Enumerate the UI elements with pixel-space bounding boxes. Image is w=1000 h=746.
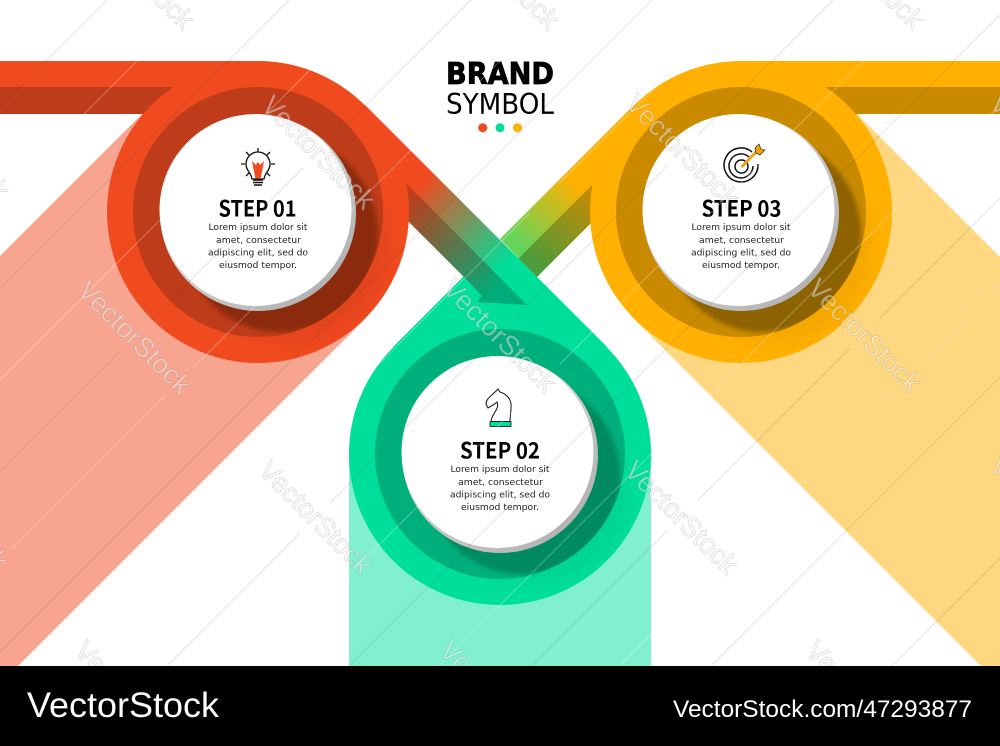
panel: step 02 green teardrop — [349, 240, 651, 605]
text block: step 01 — [208, 223, 308, 271]
text block: step 03: amet, consectetur — [699, 236, 784, 246]
panel: step 03 yellow ribbon — [500, 61, 1000, 363]
ribbon: red to green crossing band — [330, 105, 607, 347]
watermark: VectorStock stamps: VectorStock — [72, 275, 198, 400]
title: brand symbol: BRAND — [446, 57, 554, 92]
text block: step 01: amet, consectetur — [216, 236, 301, 246]
text block: step 03: Lorem ipsum dolor sit — [692, 223, 791, 233]
long shadow: green — [349, 454, 651, 666]
title: brand symbol: SYMBOL — [446, 88, 554, 121]
text block: step 02 — [450, 465, 550, 513]
long shadow: red — [0, 105, 365, 666]
heading: step 03: STEP 03 — [702, 192, 782, 224]
panel: step 02 disc — [402, 356, 598, 553]
text block: step 01: eiusmod tempor. — [219, 261, 297, 271]
text block: step 02: eiusmod tempor. — [461, 503, 539, 513]
icon: target with arrow — [724, 144, 765, 182]
watermark: VectorStock stamps: VectorStock — [253, 455, 379, 580]
panel: step 01 disc — [160, 114, 356, 311]
watermark: VectorStock stamps: VectorStock — [256, 90, 382, 215]
watermark: VectorStock stamps: VectorStock — [620, 88, 746, 213]
panel: step 03 disc — [642, 114, 839, 311]
watermark: VectorStock stamps: VectorStock — [619, 455, 745, 580]
footer bar — [0, 666, 1000, 746]
text block: step 02: adipiscing elit, sed do — [450, 490, 550, 500]
long shadow: yellow — [634, 105, 1000, 666]
watermark: VectorStock stamps: VectorStock — [437, 273, 563, 398]
icon: light bulb — [241, 148, 275, 185]
text block: step 02: amet, consectetur — [458, 478, 543, 488]
text block: step 02: Lorem ipsum dolor sit — [450, 465, 550, 475]
heading: step 02: STEP 02 — [460, 434, 540, 466]
text block: step 03 — [691, 223, 791, 271]
text block: step 03: adipiscing elit, sed do — [691, 248, 791, 258]
text block: step 03: eiusmod tempor. — [702, 261, 780, 271]
footer image id: VectorStock.com/47293877 — [673, 696, 972, 723]
panel: step 01 red ribbon — [0, 61, 409, 363]
text block: step 01: Lorem ipsum dolor sit — [208, 223, 308, 233]
heading: step 01: STEP 01 — [218, 192, 296, 224]
panel: step 02 inner ring — [375, 329, 625, 579]
title: brand symbol — [446, 57, 554, 132]
text block: step 01: adipiscing elit, sed do — [208, 248, 308, 258]
icon: chess knight — [486, 389, 511, 426]
footer brand: VectorStock — [27, 686, 220, 725]
watermark: VectorStock stamps: VectorStock — [802, 273, 928, 398]
